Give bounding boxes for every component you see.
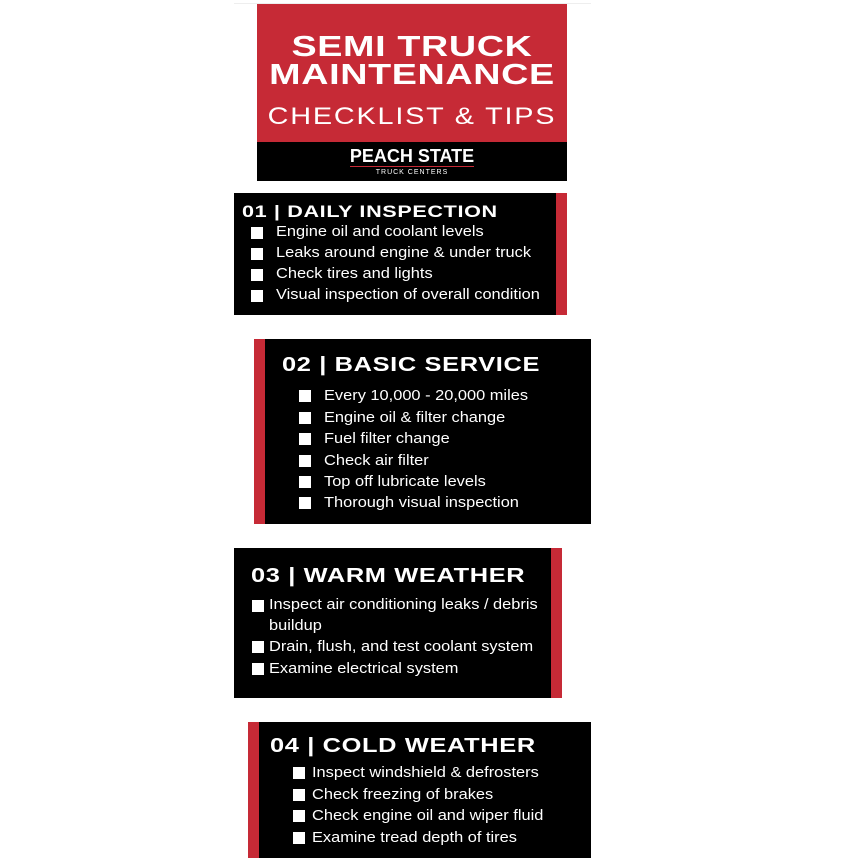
main title	[269, 31, 555, 91]
logo: Peach State Truck Centers: PEACH STATE	[350, 146, 474, 166]
heading 03: 03 | WARM WEATHER	[251, 565, 525, 587]
logo: Peach State Truck Centers	[257, 142, 567, 181]
heading 02: 02 | BASIC SERVICE	[282, 354, 540, 376]
checklist items: Inspect windshield & defrosters	[312, 765, 539, 781]
panel: 04 cold weather	[248, 722, 591, 858]
checklist items: Check engine oil and wiper fluid	[312, 808, 543, 824]
checklist items: Inspect air conditioning leaks / debris	[269, 597, 538, 613]
checklist items: Thorough visual inspection	[324, 495, 519, 511]
checklist items: Engine oil & filter change	[324, 410, 505, 426]
checklist items: Top off lubricate levels	[324, 474, 486, 490]
checklist items: Check tires and lights	[276, 266, 433, 282]
subtitle: CHECKLIST & TIPS	[268, 103, 556, 130]
divider line	[234, 3, 591, 4]
main title: SEMI TRUCK	[291, 31, 533, 63]
checklist items: Fuel filter change	[324, 431, 450, 447]
checklist items: Examine tread depth of tires	[312, 830, 517, 846]
panel: 01 daily inspection	[234, 193, 567, 315]
checklist items	[293, 765, 543, 846]
checklist items	[251, 224, 540, 303]
header banner	[257, 4, 567, 181]
panel: 02 basic service	[254, 339, 591, 524]
header red area with title	[257, 4, 567, 142]
checklist items: Check air filter	[324, 453, 429, 469]
logo: Peach State Truck Centers: TRUCK CENTERS	[376, 169, 448, 176]
checklist items: Every 10,000 - 20,000 miles	[324, 388, 528, 404]
checklist items: Check freezing of brakes	[312, 787, 493, 803]
checklist items: Drain, flush, and test coolant system	[269, 639, 533, 655]
checklist items: Engine oil and coolant levels	[276, 224, 484, 240]
checklist items: Visual inspection of overall condition	[276, 287, 540, 303]
panel: 03 warm weather	[234, 548, 562, 698]
heading 01: 01 | DAILY INSPECTION	[242, 202, 498, 221]
checklist items	[299, 388, 528, 511]
main title: MAINTENANCE	[269, 59, 555, 91]
checklist items	[252, 597, 538, 677]
checklist items: Leaks around engine & under truck	[276, 245, 531, 261]
heading 04: 04 | COLD WEATHER	[270, 735, 536, 757]
checklist items: Examine electrical system	[269, 661, 458, 677]
checklist items: buildup	[269, 618, 322, 634]
